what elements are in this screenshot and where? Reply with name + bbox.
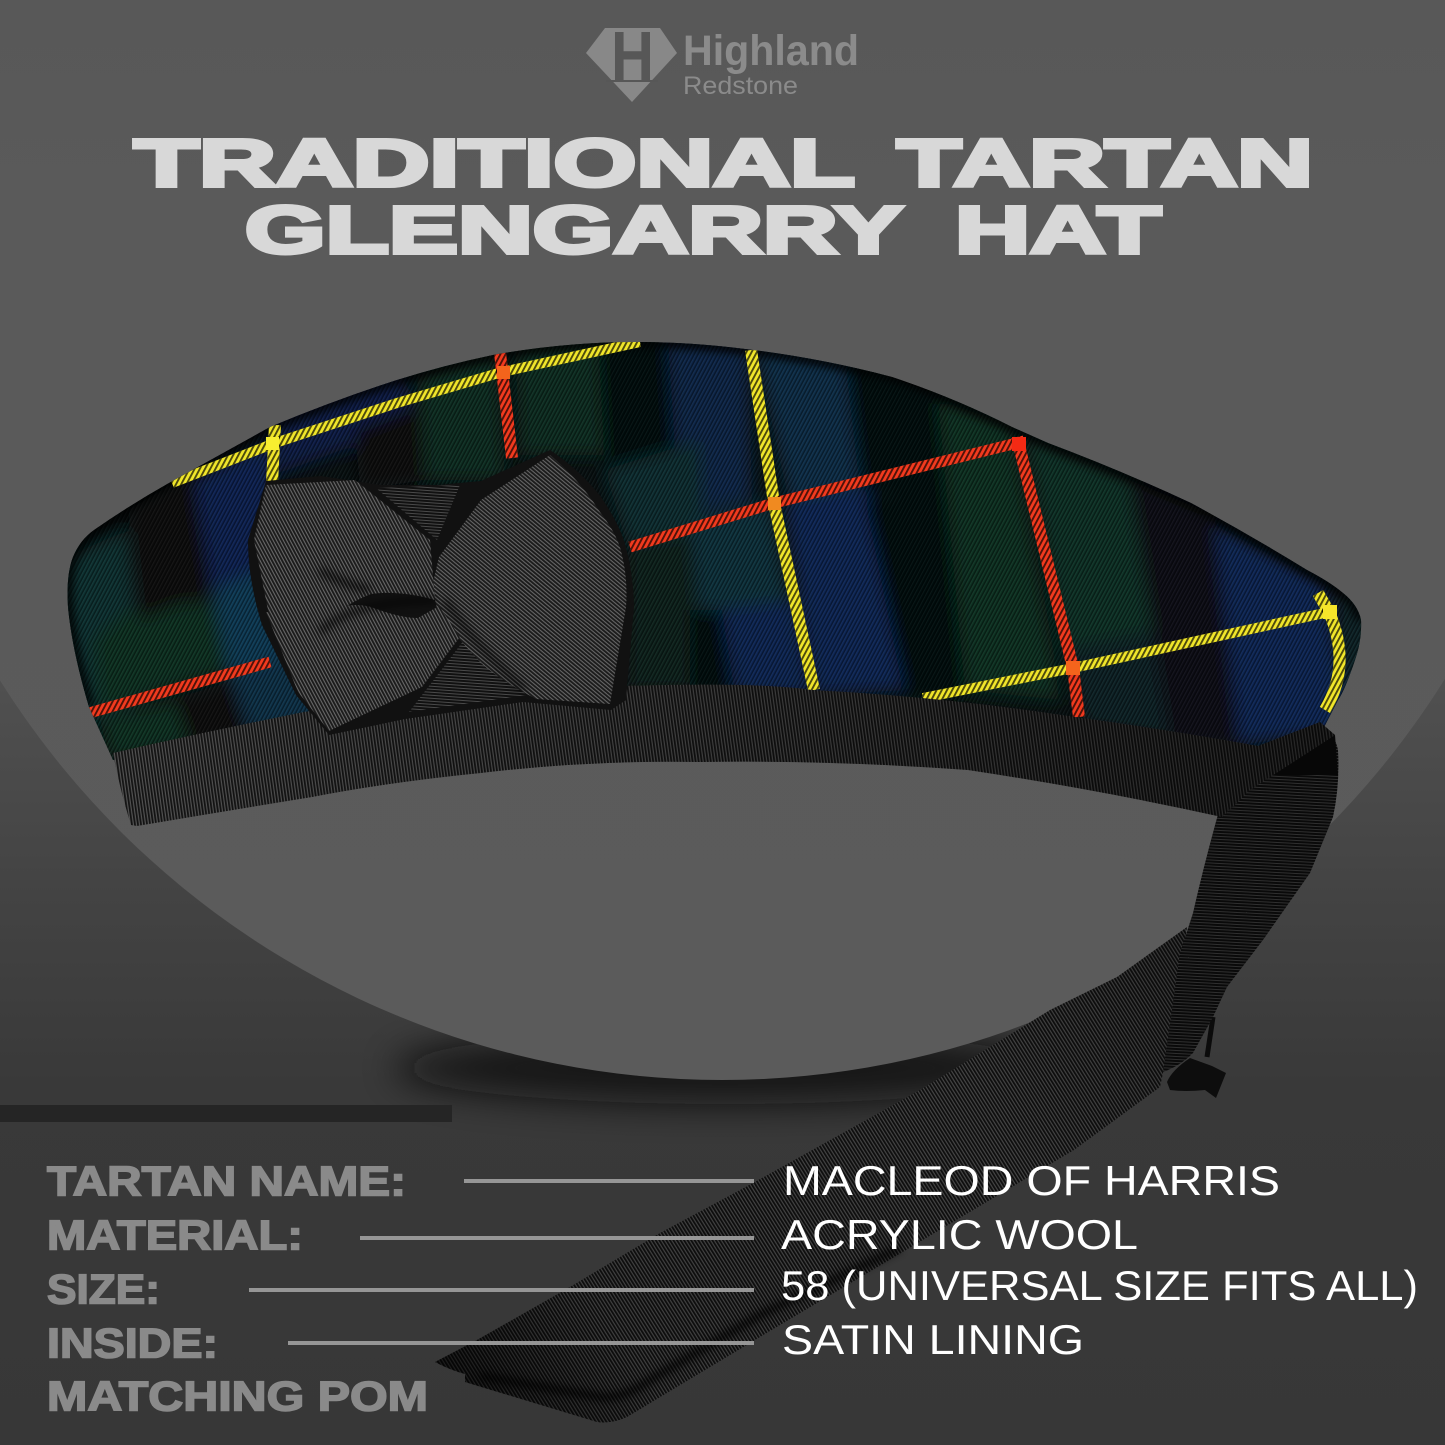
title: TARTAN [897,126,1313,201]
logo subtitle: Redstone [683,72,798,100]
icon: diamond monogram: H [611,17,654,95]
bow silhouette [248,450,634,735]
hat: tail ribbon [435,725,1338,1422]
title: HAT [955,193,1161,268]
connector lines [249,1179,754,1345]
tartan colour blocks [60,338,1370,760]
spec labels: MATERIAL: [47,1212,303,1258]
spec labels: TARTAN NAME: [47,1158,406,1204]
bow fold shadows [320,570,525,690]
title [134,126,1313,268]
hat: ribbon bow [248,450,634,735]
spec labels: MATCHING POM [47,1372,428,1420]
yellow stripes [172,342,1340,710]
title: GLENGARRY [245,193,903,268]
hat: grosgrain band [113,685,1335,826]
logo wordmark: Highland [683,27,859,75]
divider bar [0,1105,452,1122]
specifications [47,1157,1418,1420]
red stripes [89,353,1079,717]
ribbon upper fold [1163,725,1338,1072]
title: TRADITIONAL [134,126,855,201]
bow back band [376,485,527,712]
ribbon lower strip [435,927,1187,1422]
spec labels: INSIDE: [47,1320,218,1366]
icon: diamond monogram [586,17,677,102]
tartan stripes [89,342,1340,717]
crown edge shadow [68,342,1361,707]
spec values: MACLEOD OF HARRIS [783,1157,1280,1204]
stripe crossings [266,366,1337,675]
spec labels: SIZE: [47,1266,160,1312]
cord and toggle [1167,1017,1226,1098]
bow bottom lobe [266,605,460,731]
logo: Highland Redstone [586,17,859,102]
spec labels [47,1158,428,1420]
bow top lobe [254,480,435,628]
spec values: 58 (UNIVERSAL SIZE FITS ALL) [781,1262,1418,1309]
spec values [781,1157,1418,1363]
spec values: SATIN LINING [782,1316,1084,1363]
bow right lobe [432,455,626,704]
hat: tartan crown [60,335,1370,765]
spec values: ACRYLIC WOOL [781,1211,1138,1258]
